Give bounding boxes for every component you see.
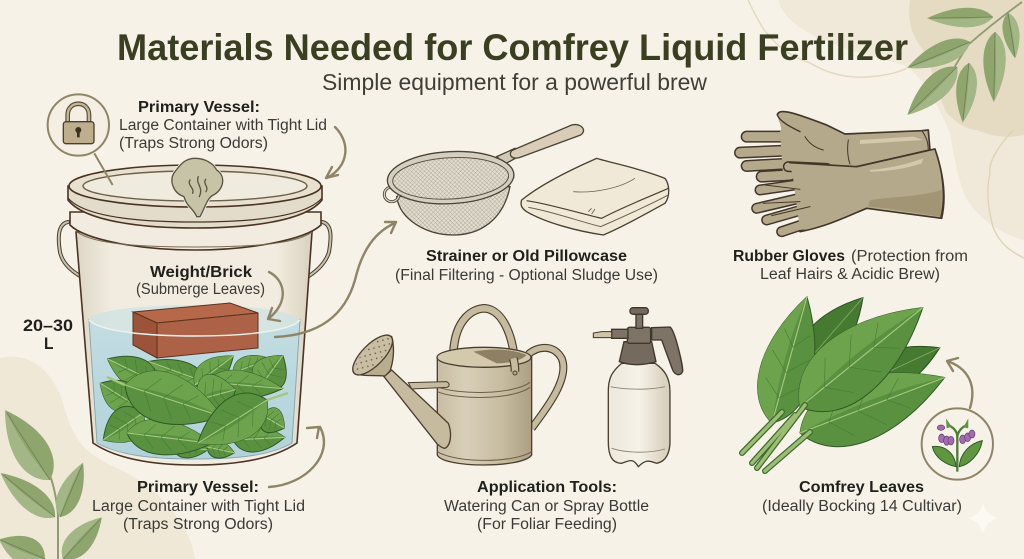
text: primary vessel top: Large Container with Tight Lid [119,117,327,134]
text: weight/brick [136,264,265,298]
text: strainer [395,248,658,284]
text: rubber gloves: Leaf Hairs & Acidic Brew) [760,266,940,283]
brace [408,382,449,389]
decorative branch top right [899,2,1023,124]
background blobs top right [748,0,1024,258]
back glove [740,112,930,180]
text: rubber gloves [733,248,968,283]
text: application tools: Application Tools: [477,479,617,496]
body [437,357,532,465]
brick [133,303,258,358]
icon: padlock callout [48,94,113,185]
text: capacity [23,316,73,353]
subtitle: Simple equipment for a powerful brew [322,69,707,95]
submerged leaves [92,345,297,462]
text: rubber gloves: (Protection from [851,248,968,265]
front glove [757,149,944,232]
text: primary vessel bottom: Large Container with Tight Lid [92,498,305,515]
text: comfrey leaves: (Ideally Bocking 14 Cultivar) [762,498,962,515]
arrow: water to strainer [275,222,396,337]
top handle [453,308,515,372]
decorative branch bottom left [0,401,111,559]
text: comfrey leaves: Comfrey Leaves [799,479,924,496]
text: capacity: 20–30 [23,316,73,335]
arrow: weight to brick [268,272,283,321]
spout [384,370,451,448]
text: strainer: Strainer or Old Pillowcase [426,248,627,265]
text: application tools: Watering Can or Spray Bottle [444,498,649,515]
water [89,320,300,459]
text: primary vessel top: (Traps Strong Odors) [119,135,268,152]
arrow: vessel label to lid [326,127,345,178]
bucket rim band [70,212,321,250]
icon: strainer [384,125,584,235]
text: primary vessel bottom: (Traps Strong Odors) [123,516,273,533]
sparkle watermark [967,502,999,535]
icon: spray bottle [593,308,683,467]
text: strainer: (Final Filtering - Optional Sludge Use) [395,267,658,284]
text: comfrey leaves [762,479,962,515]
re-draw handle end over body [513,358,515,372]
text: primary vessel top: Primary Vessel: [138,99,260,116]
icon: bucket handle [59,222,331,276]
text: application tools: (For Foliar Feeding) [477,516,617,533]
bucket body [76,232,312,465]
icon: odor cloud [172,158,223,217]
icon: comfrey leaves [742,282,956,471]
text: weight/brick: Weight/Brick [150,264,252,281]
rear handle [528,348,563,428]
bucket lid [68,186,322,228]
icon: folded pillowcase [521,158,669,235]
text: capacity: L [44,334,54,353]
icon: rubber gloves [740,112,944,232]
text: rubber gloves: Rubber Gloves [733,248,845,265]
title: Materials Needed for Comfrey Liquid Fertilizer [117,27,908,68]
text: weight/brick: (Submerge Leaves) [136,281,265,298]
rose [355,337,393,376]
icon: comfrey flower [922,408,993,480]
arrow: bottom label to bucket [269,427,324,487]
water surface front edge [89,320,300,336]
icon: watering can [347,308,563,465]
text: primary vessel bottom [92,479,305,533]
text: primary vessel top [119,99,327,152]
background blob bottom left [0,357,195,559]
text: application tools [444,479,649,533]
panel: primary vessel bucket [59,158,331,465]
text: primary vessel bottom: Primary Vessel: [137,479,259,496]
arrow: flower to leaves [947,358,972,408]
